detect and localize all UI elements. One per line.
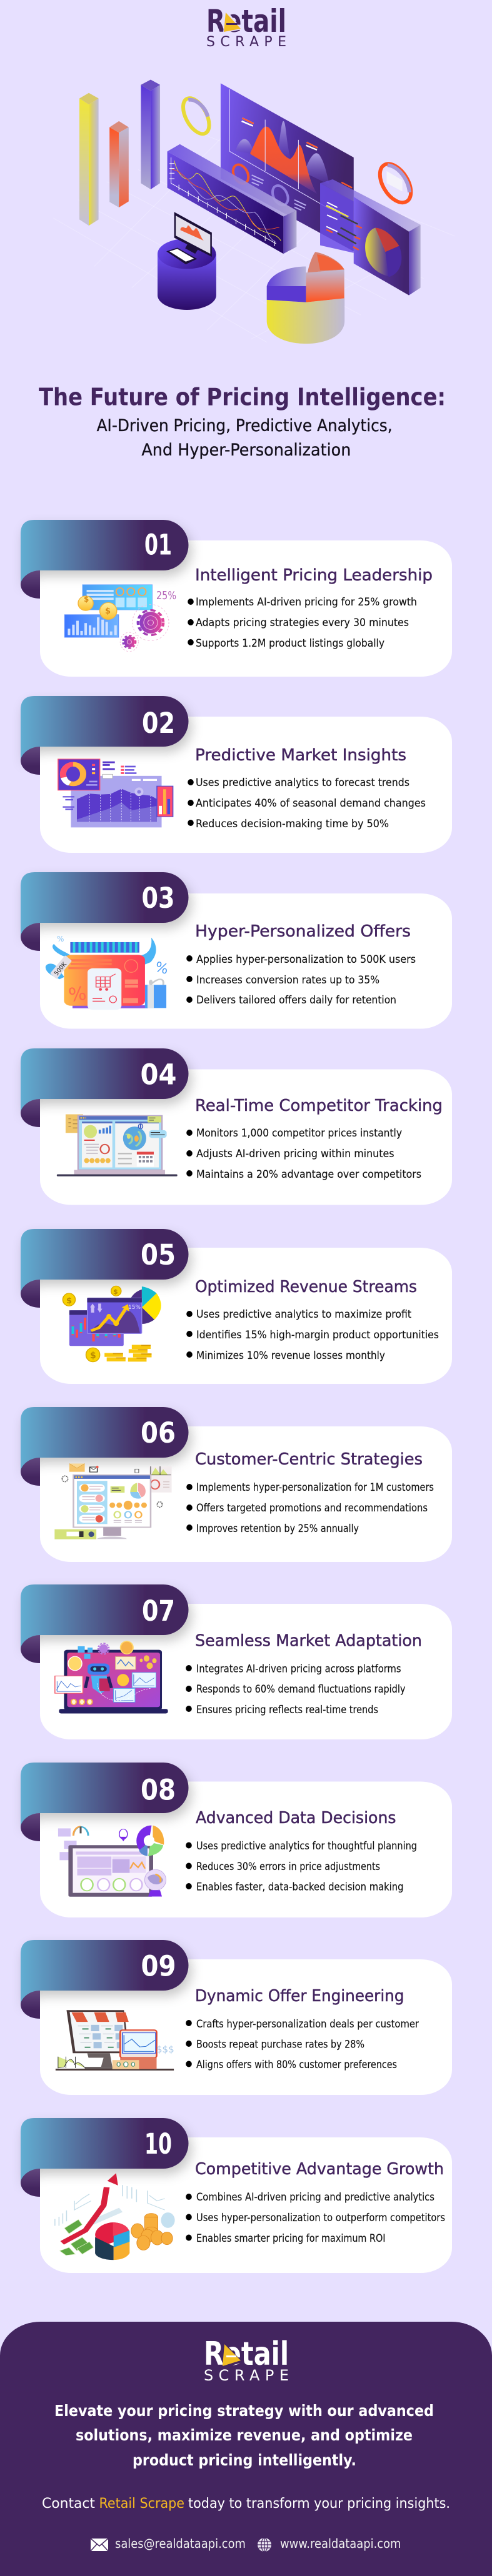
bullets 09: Crafts hyper-personalization deals per customer [196,2018,419,2030]
icon: growth arrow with money and pie [55,2173,175,2260]
panel 04: Real-Time Competitor Tracking [21,1048,452,1205]
number 05: 05 [141,1238,176,1271]
number 03: 03 [141,882,175,915]
bullets 10: Enables smarter pricing for maximum ROI [196,2232,385,2244]
closing statement: solutions, maximize revenue, and optimize [76,2426,413,2444]
bullets 10: Combines AI-driven pricing and predictive analytics [196,2191,434,2203]
icon: personalized shop offer: % [57,935,64,943]
bullets 04: Maintains a 20% advantage over competitors [196,1168,421,1180]
bullets 05 [186,1308,439,1361]
ribbon 06 [21,1407,189,1486]
bullets 06: Implements hyper-personalization for 1M customers [196,1481,434,1493]
panel 08: Advanced Data Decisions [21,1763,452,1917]
panel 06: Customer-Centric Strategies [21,1407,452,1562]
website address: www.realdataapi.com [280,2536,401,2551]
footer logo [204,2335,289,2384]
closing statement [54,2402,434,2469]
cylinder pedestal with monitor and keyboard [158,212,216,310]
main title: The Future of Pricing Intelligence: [39,384,446,411]
icon: personalized shop offer: % [67,983,88,1007]
contact sentence: Contact [42,2495,95,2512]
number 02: 02 [142,707,175,740]
ribbon 07 [21,1584,189,1663]
icon: online shop monitor and offer terminal [56,2010,174,2071]
bullets 07: Integrates AI-driven pricing across platforms [196,1663,401,1674]
heading 08: Advanced Data Decisions [196,1809,396,1828]
panel 09: Dynamic Offer Engineering [21,1940,452,2095]
number 04: 04 [140,1058,176,1091]
bullets 08 [186,1840,417,1893]
bullets 05: Uses predictive analytics to maximize profit [196,1308,411,1320]
number 06: 06 [141,1416,176,1450]
bullets 04 [186,1127,421,1180]
ribbon 04 [21,1048,189,1127]
bullets 01 [188,596,417,649]
ribbon 08 [21,1763,189,1841]
icon: revenue growth charts and coins: $ [113,1288,118,1296]
closing statement: Elevate your pricing strategy with our advanced [54,2402,434,2420]
heading 07: Seamless Market Adaptation [195,1632,422,1651]
panel 10: Competitive Advantage Growth [21,2118,452,2273]
logo: Retail Scrape [206,3,286,50]
heading 10: Competitive Advantage Growth [195,2160,444,2179]
number 08: 08 [141,1773,176,1807]
icon: online shop monitor and offer terminal: $$$ [156,2044,174,2055]
heading 06: Customer-Centric Strategies [195,1450,423,1469]
bullets 03: Increases conversion rates up to 35% [196,974,379,986]
bullets 02: Reduces decision-making time by 50% [196,818,389,830]
large screen panel with area chart [221,83,354,251]
bullets 05: Minimizes 10% revenue losses monthly [196,1350,385,1361]
icon: revenue growth charts and coins [63,1286,161,1362]
right panel with pie chart [320,179,421,296]
purple bar [141,79,160,189]
number 10: 10 [144,2127,172,2161]
ribbon 02 [21,696,189,775]
number 09: 09 [141,1949,176,1983]
closing statement: product pricing intelligently. [133,2451,356,2469]
heading 02: Predictive Market Insights [195,746,406,765]
icon: pricing dashboard with gears [64,585,176,652]
icon: email [91,2539,108,2551]
icon: pricing dashboard with gears: $ [105,607,111,616]
panel 03: Hyper-Personalized Offers [21,872,452,1028]
bullets 07 [186,1663,406,1716]
lower left panel with line chart [168,144,296,254]
icon: market analytics chart [58,759,173,827]
heading 05: Optimized Revenue Streams [195,1278,417,1296]
bullets 07: Ensures pricing reflects real-time trends [196,1704,378,1716]
logo: Retail Scrape: SCRAPE [206,34,286,50]
heading 04: Real-Time Competitor Tracking [195,1097,443,1115]
bullets 02: Uses predictive analytics to forecast trends [196,777,409,788]
heading 09: Dynamic Offer Engineering [195,1987,404,2006]
icon: personalized shop offer: % [153,959,170,978]
3D pie chart [267,252,344,344]
bullets 05: Identifies 15% high-margin product opportunities [196,1329,439,1341]
bullets 02 [188,777,426,830]
icon: pricing dashboard with gears: $ [84,595,89,604]
bullets 06 [186,1481,434,1534]
bullets 09: Aligns offers with 80% customer preferences [196,2059,397,2071]
contact sentence: today to transform your pricing insights. [188,2495,450,2512]
icon: revenue growth charts and coins: $ [90,1351,96,1361]
contact sentence: Retail Scrape [99,2495,184,2512]
yellow ring [178,94,214,138]
bullets 06: Improves retention by 25% annually [196,1523,359,1534]
icon: laptop tracking dashboard [57,1114,178,1176]
yellow bar [79,93,99,226]
icon: personalized shop offer [46,935,170,1010]
icon: personalized shop offer: 500K [53,961,68,977]
bullets 06: Offers targeted promotions and recommendations [196,1502,428,1514]
icon: customer feedback monitor [54,1464,172,1539]
icon: revenue growth charts and coins: $ [66,1296,72,1306]
panel 05: Optimized Revenue Streams [21,1229,452,1384]
footer logo: SCRAPE [204,2367,289,2384]
bullets 07: Responds to 60% demand fluctuations rapidly [196,1683,406,1695]
orange ring with envelope [374,159,417,207]
bullets 03: Applies hyper-personalization to 500K users [196,953,416,965]
footer panel [0,2322,492,2576]
icon: data decision dashboard [58,1826,166,1897]
orange bar [109,121,129,207]
email address: sales@realdataapi.com [115,2536,246,2551]
bullets 01: Supports 1.2M product listings globally [196,637,384,649]
bullets 08: Enables faster, data-backed decision making [196,1881,404,1893]
subtitle line 2: And Hyper-Personalization [141,440,351,460]
bullets 03 [186,953,416,1006]
bullets 04: Monitors 1,000 competitor prices instantly [196,1127,402,1139]
contact sentence [42,2495,450,2512]
hero illustration: isometric analytics dashboard [53,79,455,344]
icon: revenue growth charts and coins: 15% [128,1305,141,1311]
bullets 09: Boosts repeat purchase rates by 28% [196,2038,364,2051]
bullets 08: Reduces 30% errors in price adjustments [196,1861,380,1872]
bullets 09 [186,2018,419,2071]
ribbon 03 [21,872,189,951]
bullets 03: Delivers tailored offers daily for retention [196,994,396,1006]
ribbon 01 [21,520,189,599]
bullets 01: Implements AI-driven pricing for 25% growth [196,596,417,608]
bullets 10 [186,2191,445,2244]
ribbon 09 [21,1940,189,2019]
heading 03: Hyper-Personalized Offers [195,922,411,941]
icon: globe [258,2538,271,2552]
panel 01: Intelligent Pricing Leadership [21,520,452,677]
bullets 10: Uses hyper-personalization to outperform competitors [196,2212,445,2224]
ribbon 05 [21,1229,189,1308]
footer logo: Retail [204,2335,289,2373]
heading 01: Intelligent Pricing Leadership [195,566,433,585]
panel 02: Predictive Market Insights [21,696,452,853]
subtitle line 1: AI-Driven Pricing, Predictive Analytics, [97,416,393,435]
icon: laptop with robot and charts [55,1641,168,1713]
bullets 01: Adapts pricing strategies every 30 minutes [196,617,409,629]
number 07: 07 [142,1594,175,1628]
logo: Retail Scrape: Retail [206,3,286,39]
ribbon 10 [21,2118,189,2197]
number 01: 01 [144,529,172,561]
bullets 04: Adjusts AI-driven pricing within minutes [196,1148,394,1160]
icon: pricing dashboard with gears: 25% [156,590,176,602]
bullets 08: Uses predictive analytics for thoughtful planning [196,1840,417,1852]
bullets 02: Anticipates 40% of seasonal demand changes [196,797,426,809]
panel 07: Seamless Market Adaptation [21,1584,452,1739]
